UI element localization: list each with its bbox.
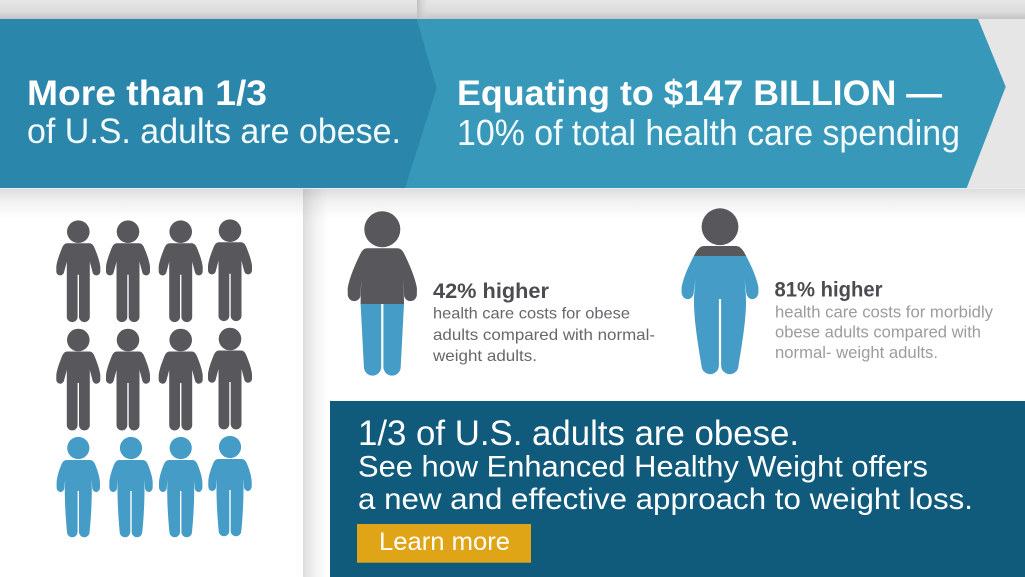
panel: call to action bbox=[330, 401, 1025, 577]
stat: 42 percent higher: weight adults. bbox=[432, 348, 537, 365]
person row 2 bbox=[56, 328, 252, 430]
text: program description: See how Enhanced Healthy Weight offers bbox=[358, 451, 928, 484]
person row 3: obese bbox=[57, 436, 252, 537]
icon: morbidly obese person bbox=[682, 208, 758, 374]
background: lower panels bbox=[0, 188, 1025, 577]
text: adults obese: of U.S. adults are obese. bbox=[27, 112, 401, 151]
stat: 42 percent higher: 42% higher bbox=[433, 280, 549, 303]
stat: 81 percent higher bbox=[774, 278, 994, 362]
button: learn more: Learn more bbox=[379, 528, 510, 556]
text: program description: a new and effective approach to weight loss. bbox=[358, 483, 973, 516]
stat: 81 percent higher: 81% higher bbox=[774, 278, 882, 302]
stat: 42 percent higher bbox=[432, 280, 655, 365]
stat: 81 percent higher: health care costs for morbidly bbox=[775, 303, 994, 321]
heading: 147 billion: Equating to $147 BILLION — bbox=[457, 74, 942, 113]
stat: 42 percent higher: health care costs for obese bbox=[433, 306, 630, 323]
background: top strip bbox=[0, 0, 1025, 19]
banner segment: adults bbox=[0, 19, 437, 188]
banner bbox=[0, 19, 1025, 189]
button: learn more bbox=[357, 524, 531, 563]
heading: more than one third: More than 1/3 bbox=[27, 74, 267, 113]
banner segment: spending bbox=[400, 19, 1006, 188]
pictogram: grid of twelve people bbox=[56, 219, 252, 537]
icon: obese person bbox=[348, 211, 417, 376]
heading: call to action: 1/3 of U.S. adults are obese. bbox=[358, 414, 799, 453]
text: share of spending: 10% of total health care spending bbox=[457, 112, 960, 153]
person row 1 bbox=[56, 219, 252, 322]
stat: 81 percent higher: normal- weight adults. bbox=[775, 344, 938, 362]
stat: 42 percent higher: adults compared with normal- bbox=[433, 327, 655, 344]
stat: 81 percent higher: obese adults compared with bbox=[775, 324, 981, 342]
banner right backdrop bbox=[960, 19, 1025, 188]
text: program description bbox=[358, 451, 973, 516]
